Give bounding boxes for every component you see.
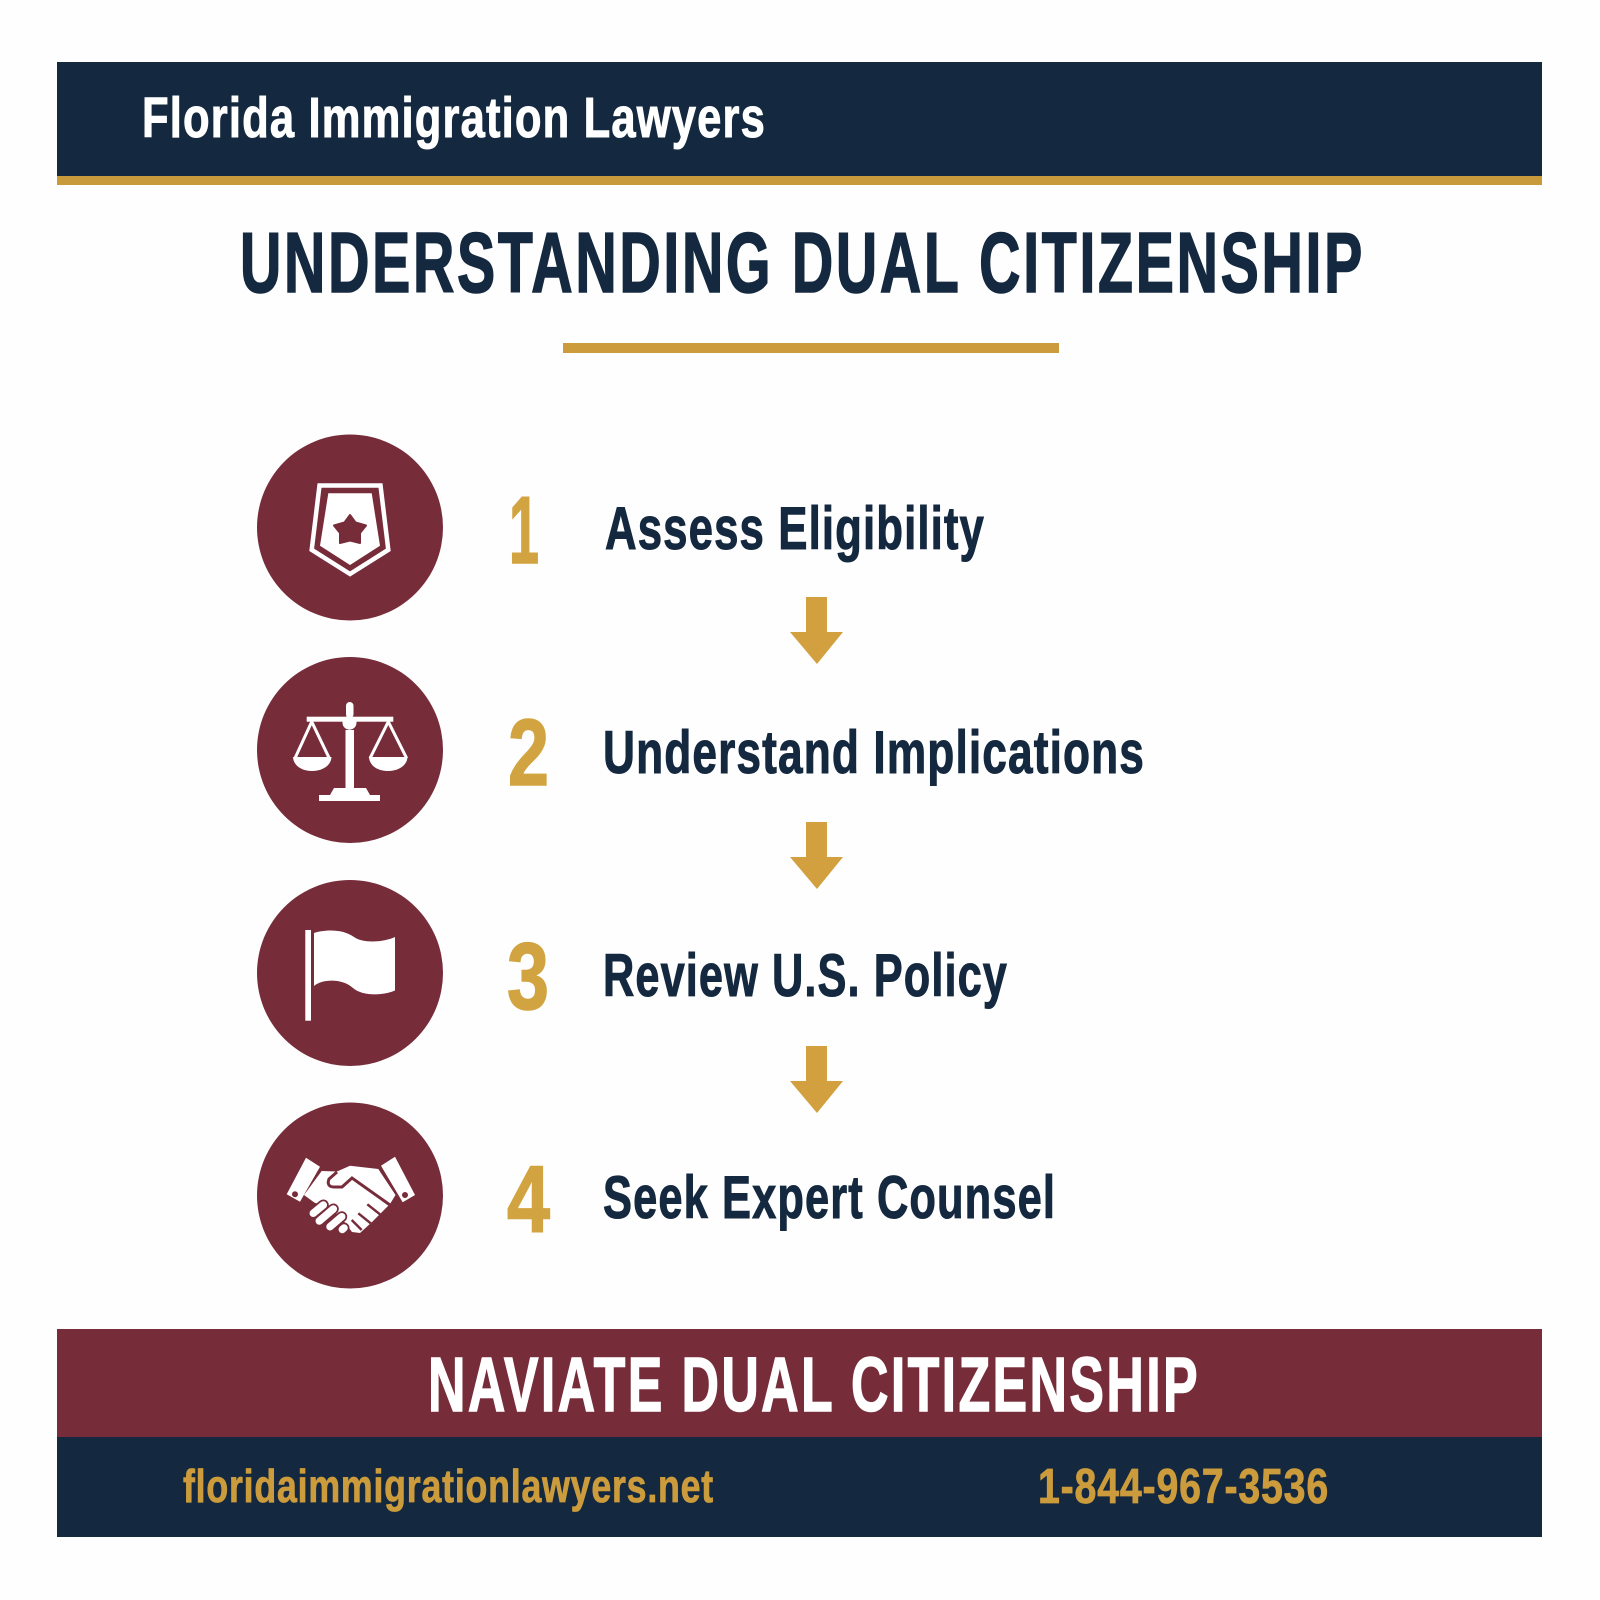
header band	[57, 62, 1542, 185]
arrow 1	[790, 597, 843, 664]
title underline	[563, 343, 1059, 353]
number 1: 1	[509, 477, 539, 584]
icon: handshake	[257, 1102, 443, 1288]
label: Review U.S. Policy: Review U.S. Policy	[603, 942, 1008, 1009]
website: floridaimmigrationlawyers.net	[183, 1460, 714, 1512]
number 3: 3	[507, 924, 549, 1030]
step 3	[257, 880, 1008, 1066]
footer contact bar	[57, 1437, 1542, 1537]
arrow 2	[790, 822, 843, 889]
number 4: 4	[507, 1147, 550, 1253]
icon: flag	[257, 880, 443, 1066]
icon: shield	[257, 434, 443, 620]
label: Seek Expert Counsel: Seek Expert Counsel	[603, 1164, 1056, 1231]
step 2	[257, 657, 1145, 843]
step 4	[257, 1102, 1056, 1288]
phone: 1-844-967-3536	[1038, 1460, 1329, 1514]
call to action banner	[57, 1329, 1542, 1437]
icon: scales	[257, 657, 443, 843]
label: Assess Eligibility: Assess Eligibility	[605, 495, 985, 562]
number 2: 2	[508, 700, 549, 806]
arrow 3	[790, 1046, 843, 1113]
label: Understand Implications: Understand Implications	[603, 719, 1145, 786]
banner text: NAVIATE DUAL CITIZENSHIP	[428, 1342, 1200, 1428]
step 1	[257, 434, 985, 620]
header firm name: Florida Immigration Lawyers	[142, 86, 766, 150]
